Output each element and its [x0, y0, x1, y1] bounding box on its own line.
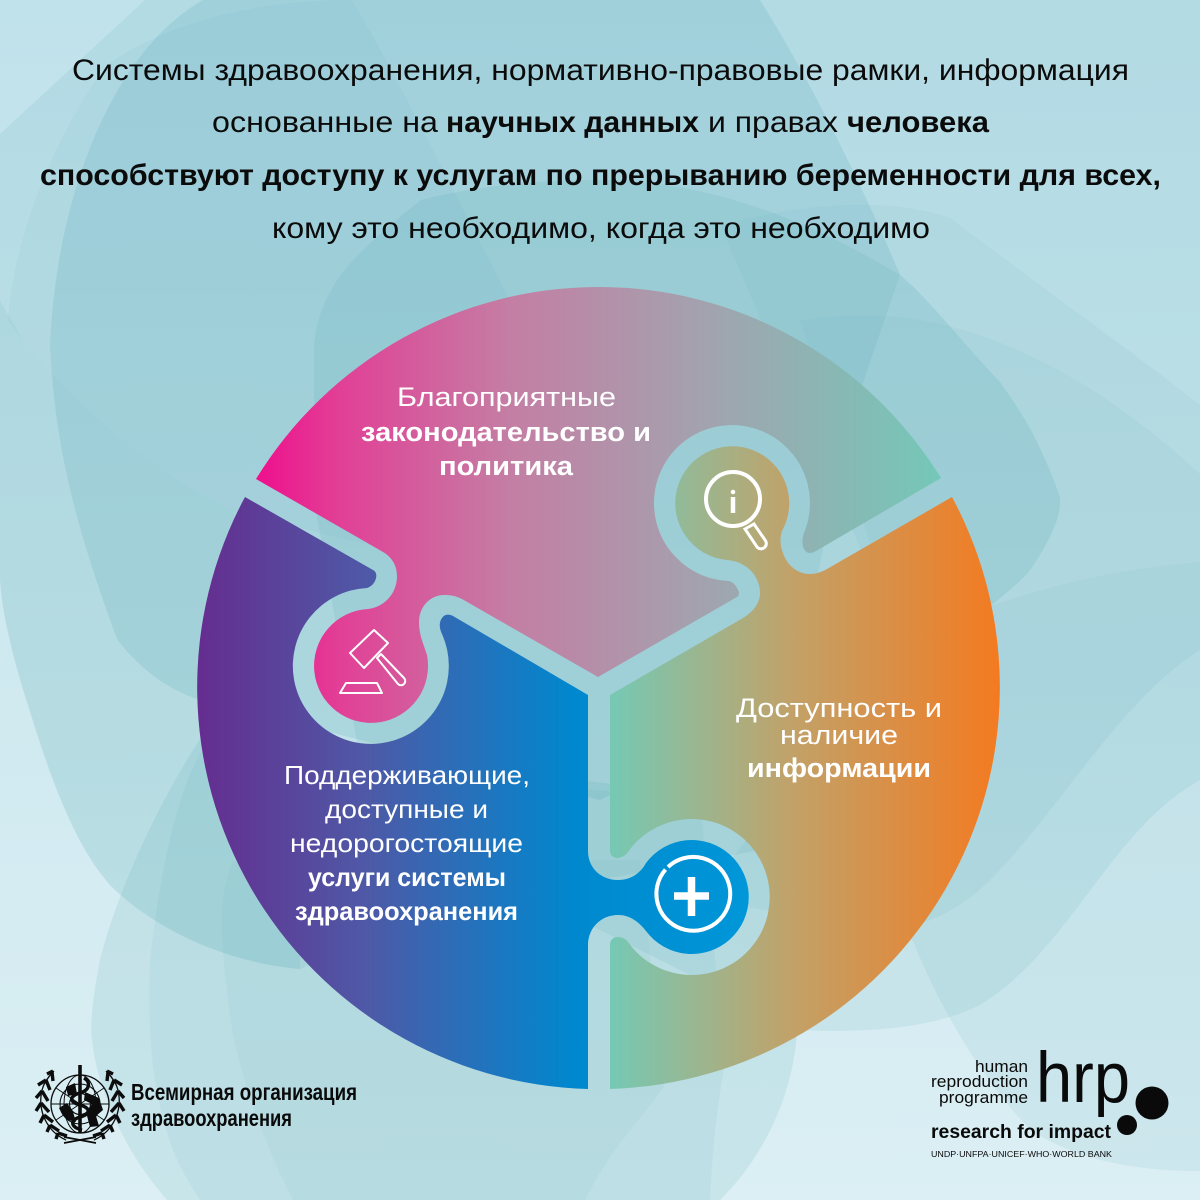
- label: health services: здравоохранения: [295, 896, 518, 926]
- logo: human reproduction programme: human: [975, 1057, 1028, 1076]
- logo: human reproduction programme: [931, 1039, 1168, 1159]
- heading text: и правах: [708, 106, 838, 139]
- label: health services: Поддерживающие,: [284, 760, 530, 790]
- text: organization name: [131, 1079, 357, 1131]
- label: legislation and policy: законодательство и: [361, 417, 651, 447]
- icon: gavel: [340, 630, 405, 693]
- label: health services: доступные и: [325, 794, 488, 824]
- label: health services: услуги системы: [308, 862, 506, 892]
- heading text: [40, 54, 1161, 245]
- heading text: Системы здравоохранения, нормативно-правовые рамки, информация: [72, 54, 1129, 87]
- text: organization name: Всемирная организация: [131, 1079, 357, 1105]
- heading text: основанные на: [212, 106, 438, 139]
- heading text: человека: [847, 106, 989, 139]
- panel: health services: [197, 497, 749, 1089]
- logo: World Health Organization: [36, 1065, 357, 1143]
- label: legislation and policy: Благоприятные: [397, 382, 616, 412]
- heading text: научных данных: [446, 106, 699, 139]
- label: availability of information: [736, 693, 942, 783]
- label: availability of information: Доступность и: [736, 693, 942, 723]
- label: legislation and policy: политика: [439, 451, 574, 481]
- label: availability of information: наличие: [780, 720, 898, 750]
- icon: plus in circle: [656, 857, 730, 931]
- logo: human reproduction programme: UNDP·UNFPA·UNICEF·WHO·WORLD BANK: [931, 1149, 1112, 1159]
- logo: human reproduction programme: reproduction: [931, 1072, 1028, 1091]
- heading text: кому это необходимо, когда это необходимо: [272, 212, 930, 245]
- label: health services: недорогостоящие: [290, 828, 523, 858]
- heading text: способствуют доступу к услугам по прерыванию беременности для всех,: [40, 159, 1161, 192]
- label: legislation and policy: [361, 382, 651, 481]
- logo: human reproduction programme: programme: [939, 1088, 1028, 1107]
- icon: WHO emblem: [36, 1065, 124, 1143]
- logo: human reproduction programme: hrp: [1036, 1039, 1130, 1118]
- puzzle circle: [197, 287, 1000, 1089]
- logo: human reproduction programme: research for impact: [931, 1122, 1112, 1143]
- panel: availability of information: [610, 446, 1000, 1089]
- icon: magnifier with info: [706, 472, 766, 549]
- label: health services: [284, 760, 530, 926]
- text: organization name: здравоохранения: [131, 1105, 292, 1131]
- label: availability of information: информации: [747, 753, 931, 783]
- panel: legislation and policy: [256, 287, 941, 723]
